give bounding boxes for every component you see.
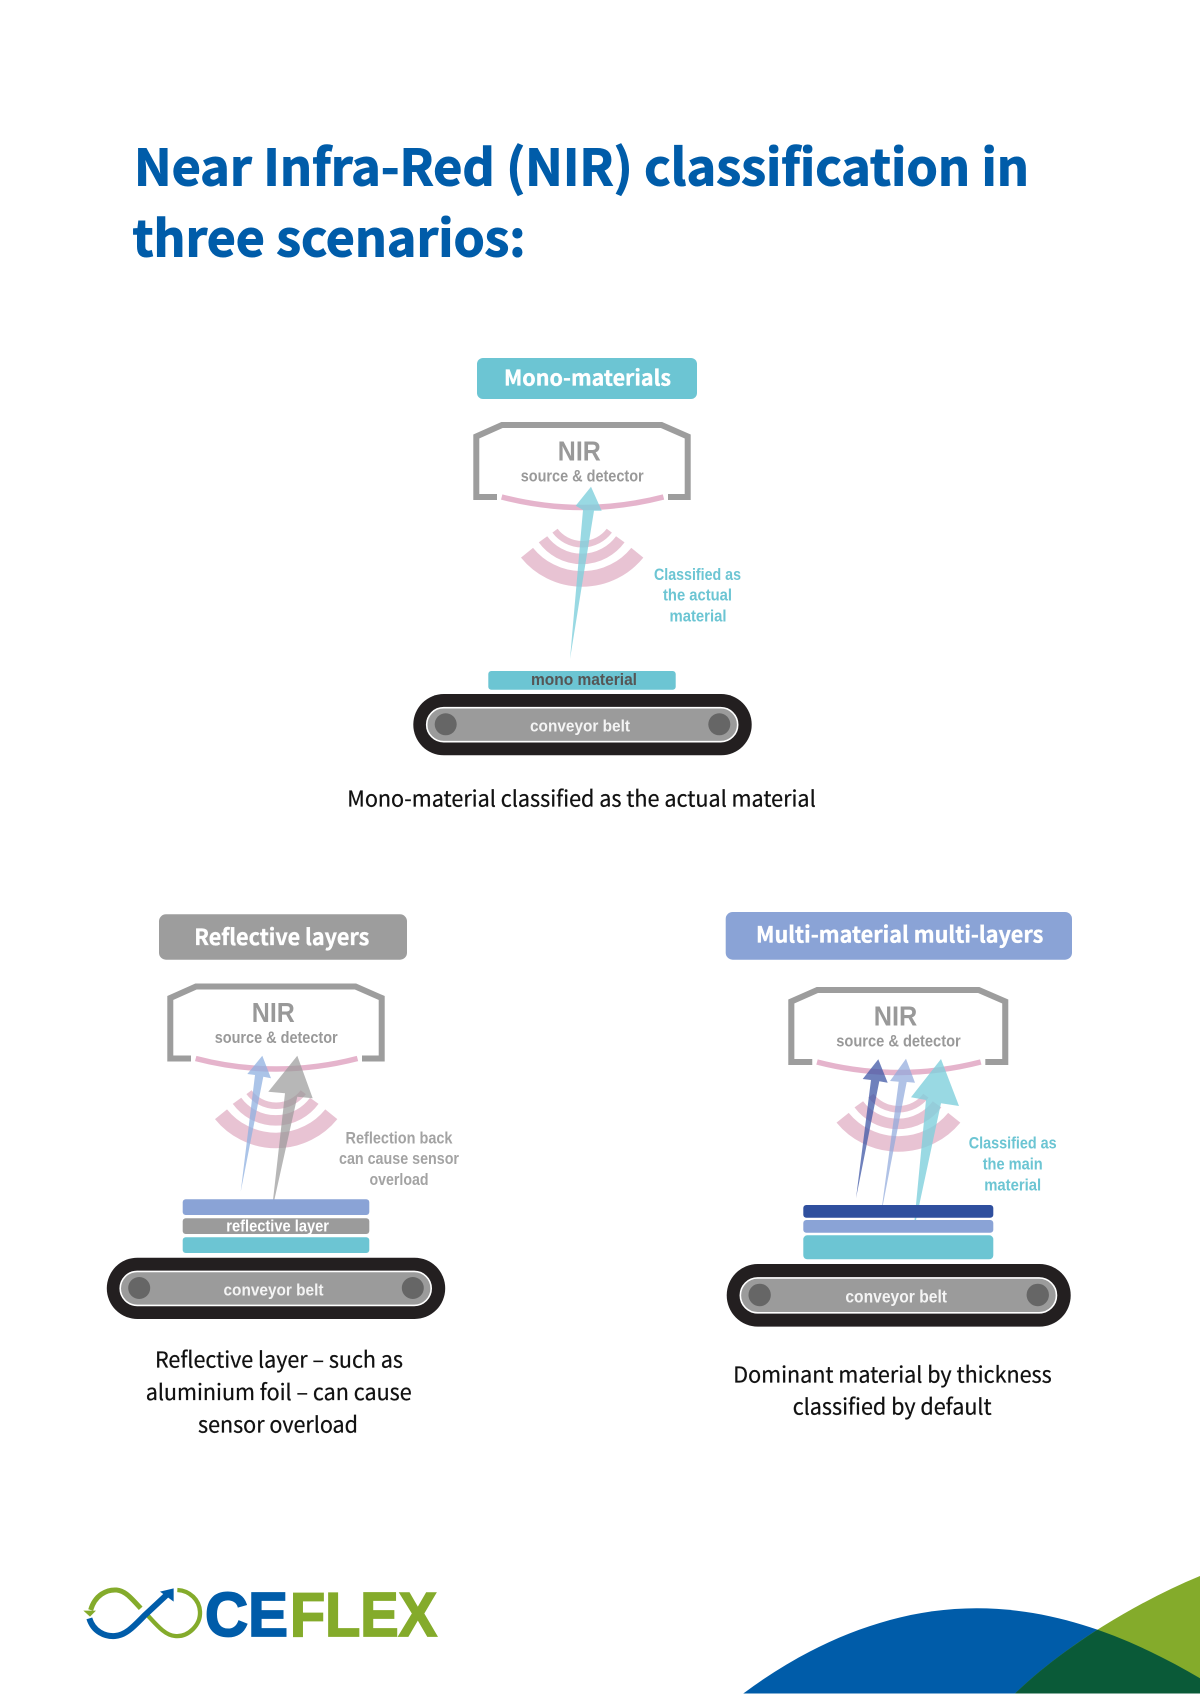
arrow: top layer signal	[856, 1059, 888, 1198]
conveyor belt: conveyor belt	[224, 1280, 324, 1299]
NIR source and detector: source & detector	[521, 468, 644, 486]
callout: reflection back can cause sensor overload: Reflection back	[346, 1129, 453, 1147]
conveyor belt	[727, 1264, 1071, 1327]
heading: mono-materials: Mono-materials	[504, 362, 671, 392]
conveyor belt: conveyor belt	[530, 717, 630, 736]
conveyor belt	[107, 1258, 445, 1319]
conveyor belt: conveyor belt	[845, 1286, 947, 1307]
heading: mono-materials	[477, 358, 697, 399]
mono material layer: mono material	[531, 671, 637, 689]
callout: reflection back can cause sensor overload: overload	[370, 1171, 428, 1189]
callout: classified as the main material: the main	[983, 1155, 1043, 1173]
callout: classified as the actual material: material	[670, 608, 726, 626]
callout: classified as the actual material: Classified as	[654, 566, 741, 584]
panel: reflective layers	[107, 914, 459, 1440]
material layers	[803, 1205, 993, 1259]
mono material layer	[488, 671, 676, 690]
logo: CEFLEX	[83, 1581, 437, 1650]
NIR source and detector: NIR	[874, 1001, 917, 1032]
callout: classified as the main material: material	[984, 1177, 1041, 1195]
caption: reflective layers: Reflective layer – such as	[155, 1342, 403, 1374]
wordmark: FLEX	[290, 1581, 437, 1650]
NIR source and detector: NIR	[558, 436, 601, 467]
icon: infinity loop with arrows	[83, 1588, 200, 1636]
title	[132, 128, 1029, 272]
caption: mono-material: Mono-material classified as the actual material	[347, 782, 816, 814]
title: three scenarios:	[132, 200, 526, 272]
NIR source and detector	[476, 425, 688, 579]
arrow: main material signal	[911, 1059, 959, 1233]
heading: reflective layers	[159, 914, 407, 960]
heading: reflective layers: Reflective layers	[194, 920, 369, 952]
caption: multi-material	[733, 1357, 1052, 1421]
callout: classified as the actual material	[654, 566, 741, 626]
arrow: middle layer signal	[881, 1059, 915, 1216]
caption: reflective layers: sensor overload	[198, 1408, 358, 1440]
callout: reflection back can cause sensor overload: can cause sensor	[339, 1150, 459, 1168]
arrow: reflected signal	[570, 487, 602, 659]
title: Near Infra-Red (NIR) classification in	[134, 128, 1029, 200]
conveyor belt	[413, 694, 752, 755]
heading: multi-material multi-layers	[726, 912, 1072, 960]
NIR source and detector	[170, 986, 382, 1140]
wordmark	[205, 1581, 437, 1650]
caption: reflective layers: aluminium foil – can cause	[146, 1375, 412, 1407]
callout: classified as the main material: Classified as	[969, 1134, 1057, 1152]
callout: classified as the main material	[969, 1134, 1057, 1195]
panel: mono-materials	[347, 358, 816, 814]
caption: multi-material: classified by default	[793, 1389, 992, 1421]
wordmark: CE	[205, 1581, 288, 1650]
caption: multi-material: Dominant material by thickness	[733, 1357, 1052, 1389]
decorative hills	[743, 1576, 1200, 1694]
caption: reflective layers	[146, 1342, 412, 1440]
material layers with reflective layer	[183, 1199, 369, 1253]
NIR source and detector	[791, 990, 1005, 1144]
NIR source and detector: source & detector	[215, 1029, 338, 1047]
callout: reflection back can cause sensor overload	[339, 1129, 459, 1189]
arrow: reflection back	[268, 1056, 313, 1212]
NIR source and detector: source & detector	[836, 1032, 961, 1051]
NIR source and detector: NIR	[252, 997, 295, 1028]
heading: multi-material multi-layers: Multi-material multi-layers	[756, 917, 1043, 949]
material layers with reflective layer: reflective layer	[226, 1218, 330, 1236]
panel: multi-material multi-layers	[726, 912, 1072, 1421]
arrow: blue layer signal	[241, 1056, 271, 1192]
callout: classified as the actual material: the actual	[663, 587, 732, 605]
